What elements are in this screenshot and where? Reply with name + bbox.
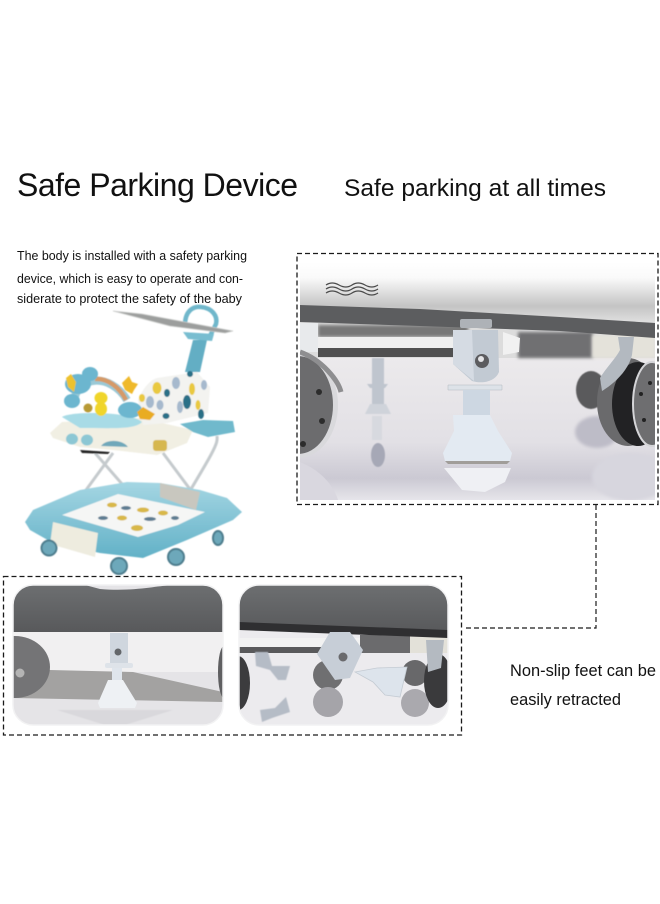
left wheel bolts (300, 389, 325, 447)
dark undercarriage bar (300, 305, 655, 338)
right wheel far (576, 371, 606, 409)
base front pad (50, 522, 98, 557)
distant foot (365, 358, 391, 467)
tray badge (153, 440, 167, 451)
caption: non-slip feet: Non-slip feet can be (510, 662, 656, 680)
tray underside strip (80, 450, 110, 454)
rail dark band (318, 325, 468, 337)
wheels (42, 531, 223, 574)
subtitle: Safe parking at all times (344, 175, 606, 202)
description text block: siderate to protect the safety of the baby (17, 292, 243, 306)
panel dashed border (4, 576, 462, 735)
title: Safe Parking Device (17, 167, 298, 203)
left photo edge (13, 585, 223, 725)
left wheel reflection (300, 469, 338, 500)
canopy pole (185, 340, 207, 372)
tray body (50, 418, 193, 455)
right wheel black gap (612, 362, 645, 446)
tray arch decal (101, 441, 128, 447)
right wheel bolts (639, 381, 652, 422)
toy stars (66, 374, 155, 420)
baby walker product illustration (25, 307, 242, 574)
caption: non-slip feet (510, 662, 656, 709)
frame legs (70, 436, 217, 524)
seat grey leaves (146, 377, 207, 413)
toy duck (94, 392, 108, 416)
seat navy leaves (162, 371, 204, 419)
rail lower dark band (318, 348, 453, 357)
canopy bracket (183, 332, 214, 341)
toy rainbow orange band (95, 379, 126, 400)
panel dashed border (297, 254, 658, 504)
left wheel fender (300, 352, 341, 392)
right wheel fork (600, 337, 634, 391)
main photo panel: retractable foot (258, 254, 660, 504)
description text block: The body is installed with a safety parking (17, 249, 247, 263)
photo scene (300, 280, 655, 500)
mat navy pattern (98, 506, 179, 521)
right wheel hub (632, 361, 655, 447)
background white piece (503, 332, 520, 355)
infographic canvas (2, 172, 659, 736)
toy ball (84, 404, 92, 412)
toy rainbow arch (74, 381, 127, 402)
right wheel far reflection (575, 416, 619, 448)
toy clouds (64, 367, 142, 418)
photo: foot extended (0, 585, 230, 725)
central foot (443, 319, 512, 492)
wave logo (326, 283, 378, 295)
seat back (138, 372, 210, 425)
dashed connector line (465, 505, 596, 628)
description text block (17, 249, 247, 306)
base back pad (160, 483, 200, 510)
background rail base (306, 326, 655, 358)
photo: foot retracted (226, 585, 452, 725)
left wheel (320, 368, 338, 444)
canopy handle (185, 307, 216, 338)
canopy (113, 311, 233, 333)
mat yellow pattern (107, 502, 168, 531)
tray top (62, 413, 142, 428)
bottom panel: extended and retracted feet (0, 576, 462, 735)
tray round vents (66, 434, 93, 446)
background dark block (518, 332, 593, 358)
right photo edge (239, 585, 448, 725)
left wheel hub (300, 356, 333, 454)
right wheel outer (597, 358, 642, 446)
side seat bracket (180, 420, 235, 437)
right wheel main reflection (593, 471, 655, 500)
left bracket (300, 323, 318, 352)
rail light band (318, 337, 468, 348)
description text block: device, which is easy to operate and con- (17, 272, 243, 286)
seat yellow leaves (139, 382, 200, 410)
body underside fade (300, 280, 655, 322)
floor (300, 356, 655, 500)
background cream block (590, 334, 597, 358)
caption: non-slip feet: easily retracted (510, 691, 621, 709)
base mat (62, 494, 205, 537)
base frame (25, 482, 242, 558)
